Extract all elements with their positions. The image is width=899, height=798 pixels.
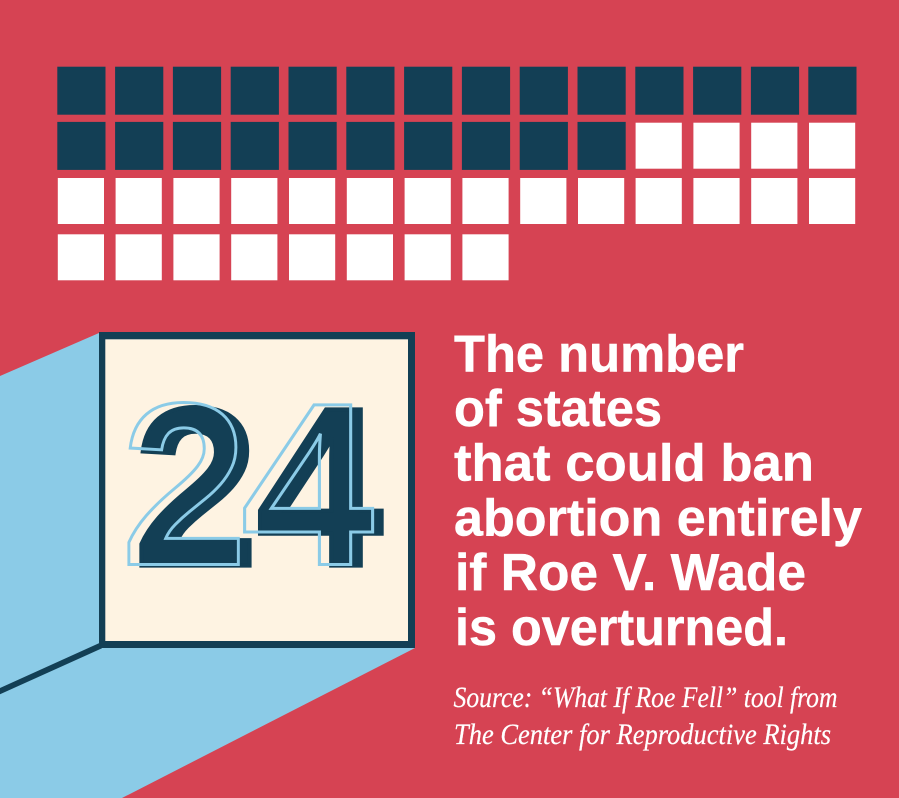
source note: The Center for Reproductive Rights (454, 718, 831, 751)
navy squares: states that could ban (57, 67, 857, 170)
solid digit 4: 4 (256, 361, 383, 615)
headline: of states (454, 380, 662, 438)
navy perspective edge line (0, 643, 102, 694)
source note (454, 681, 838, 751)
headline: if Roe V. Wade (455, 544, 806, 602)
solid digit 2: 2 (134, 360, 259, 614)
headline: abortion entirely (454, 490, 862, 548)
outlined digit 4: 4 (241, 355, 374, 614)
headline: is overturned. (455, 599, 788, 657)
headline (454, 326, 862, 657)
headline: that could ban (454, 434, 814, 492)
number box (99, 332, 415, 648)
source note: Source: “What If Roe Fell” tool from (454, 681, 838, 714)
box fill (105, 339, 408, 641)
outlined digit 2: 2 (121, 354, 247, 614)
square grid: 24 navy states and 26 white states (57, 67, 857, 280)
box frame (99, 332, 415, 648)
headline: The number (454, 326, 744, 384)
big number 24 (121, 354, 383, 615)
white squares: remaining states (58, 123, 855, 280)
blue perspective shadow (0, 333, 415, 798)
